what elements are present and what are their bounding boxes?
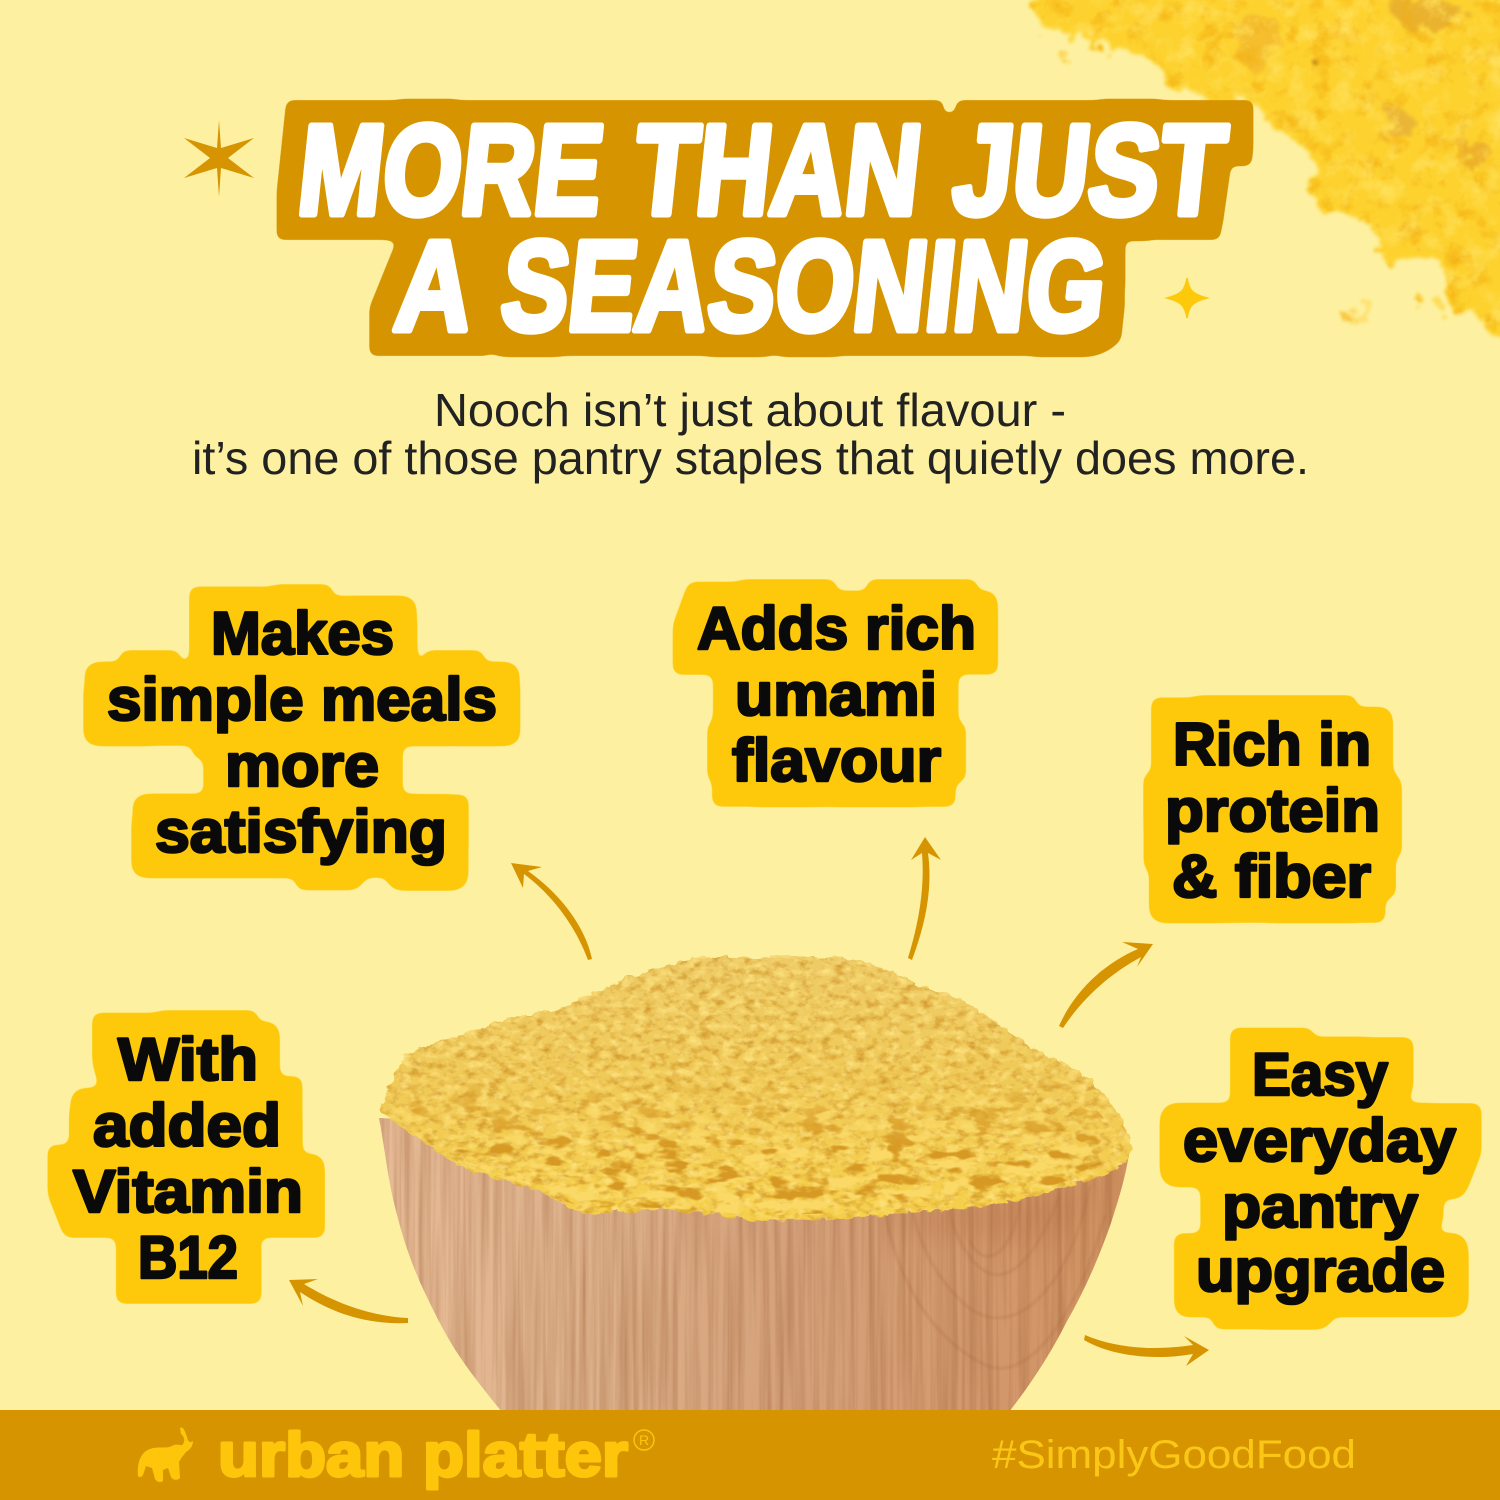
- callout: easy everyday pantry upgrade: upgrade: [1196, 1237, 1445, 1304]
- callout: rich in protein and fiber: [1165, 711, 1380, 910]
- powder scatter top right: [967, 0, 1500, 350]
- arrow to rich in protein and fiber: [1059, 942, 1153, 1028]
- title: JUST: [947, 99, 1232, 242]
- callout: with added vitamin b12: [73, 1026, 303, 1291]
- callout: rich in protein and fiber: Rich in: [1173, 711, 1371, 778]
- callout: makes simple meals more satisfying: simple meals: [107, 666, 497, 733]
- title: SEASONING: [495, 215, 1113, 358]
- title: [292, 99, 1232, 358]
- callout: adds rich umami flavour: [697, 595, 976, 794]
- title: A: [389, 215, 480, 358]
- callout: easy everyday pantry upgrade: [1183, 1041, 1457, 1304]
- callout: makes simple meals more satisfying: Makes: [211, 600, 394, 667]
- bowl of nutritional yeast flakes: [379, 957, 1131, 1412]
- footer bar: [0, 1410, 1500, 1500]
- callout: with added vitamin b12: With: [118, 1026, 258, 1093]
- icon: large thin sparkle: [184, 120, 254, 197]
- arrow to makes simple meals: [511, 863, 592, 960]
- callout: with added vitamin b12: B12: [138, 1224, 238, 1291]
- subtitle: it’s one of those pantry staples that quietly does more.: [192, 432, 1309, 484]
- callout: adds rich umami flavour: umami: [735, 661, 937, 728]
- callout: rich in protein and fiber: & fiber: [1172, 843, 1371, 910]
- callout: easy everyday pantry upgrade: pantry: [1222, 1173, 1419, 1240]
- registered mark: R: [639, 1432, 649, 1448]
- flake pile: [380, 957, 1131, 1221]
- coarse flakes along the lower pile: [386, 1049, 1124, 1216]
- callout: adds rich umami flavour: Adds rich: [697, 595, 976, 662]
- subtitle: Nooch isn’t just about flavour -: [434, 384, 1066, 436]
- arrow to easy everyday pantry upgrade: [1084, 1335, 1209, 1366]
- callout: makes simple meals more satisfying: satisfying: [155, 798, 447, 865]
- registered mark: [634, 1430, 654, 1450]
- title backing: [305, 135, 1210, 320]
- hashtag: #SimplyGoodFood: [992, 1433, 1356, 1477]
- arrow to adds rich umami flavour: [908, 837, 941, 960]
- callout: adds rich umami flavour: flavour: [732, 727, 941, 794]
- wooden bowl: [379, 1118, 1129, 1412]
- callout: easy everyday pantry upgrade: everyday: [1183, 1107, 1457, 1174]
- callout: with added vitamin b12: added: [93, 1092, 281, 1159]
- icon: elephant logo: [138, 1428, 193, 1482]
- arrow to with added vitamin b12: [289, 1279, 408, 1323]
- brand name: urban platter: [218, 1421, 628, 1490]
- callout: rich in protein and fiber: protein: [1165, 777, 1380, 844]
- title: MORE: [292, 99, 610, 242]
- callout: makes simple meals more satisfying: [107, 600, 497, 865]
- title: THAN: [627, 99, 928, 242]
- callout: with added vitamin b12: Vitamin: [73, 1158, 303, 1225]
- callout: makes simple meals more satisfying: more: [225, 732, 379, 799]
- icon: small gold sparkle: [1167, 278, 1207, 318]
- callout: easy everyday pantry upgrade: Easy: [1252, 1041, 1389, 1108]
